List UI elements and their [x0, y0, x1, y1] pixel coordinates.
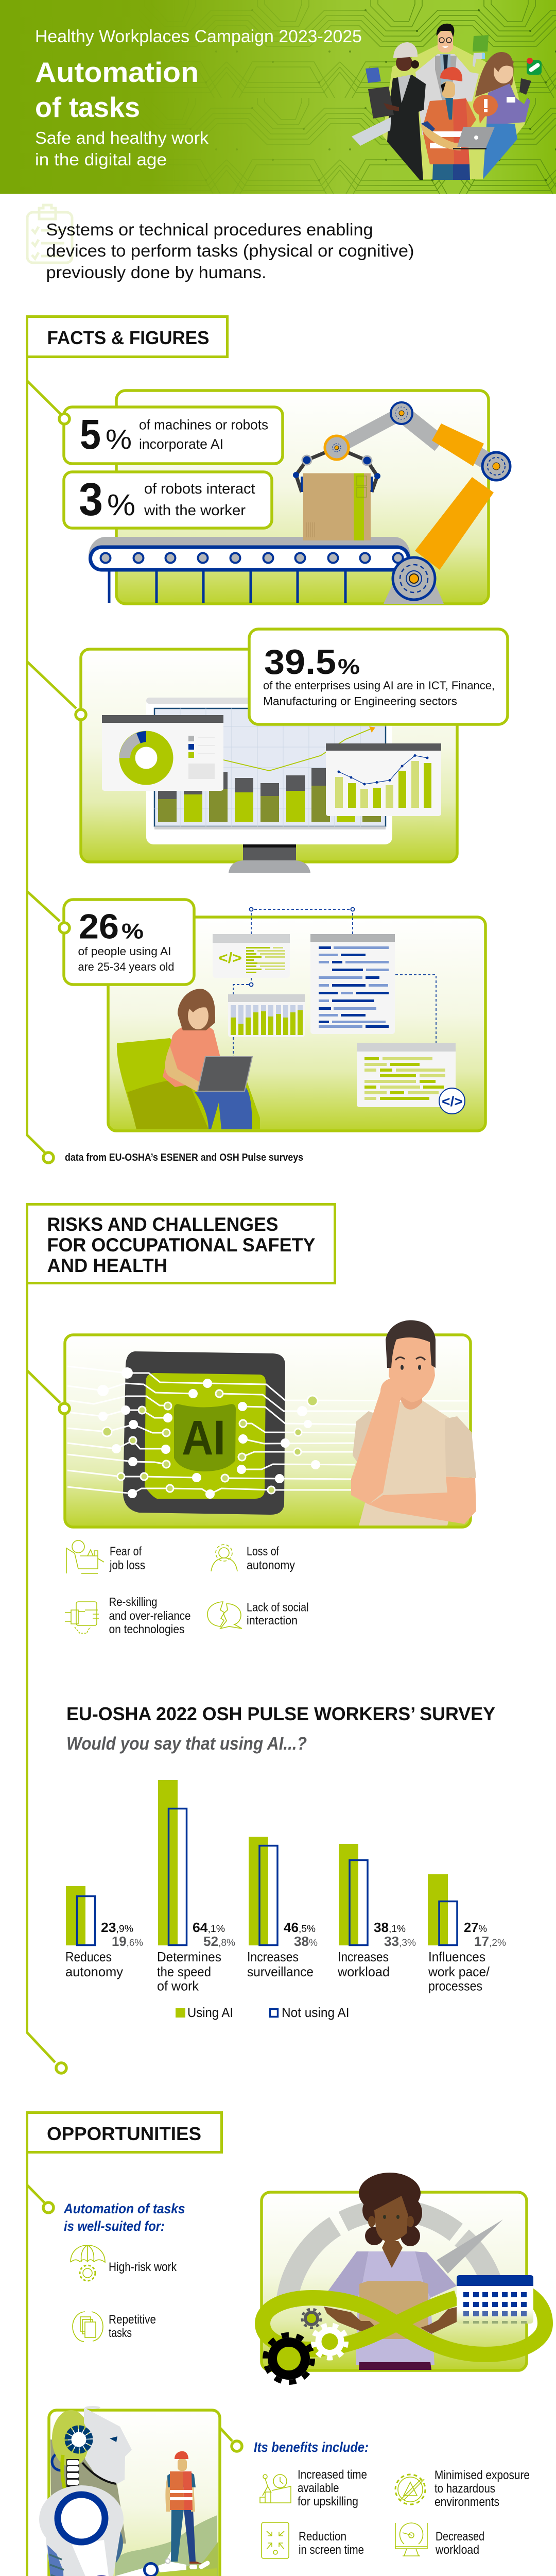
icon: hand with phone chained — [65, 1602, 99, 1633]
risk: re-skilling: Re-skilling — [109, 1595, 158, 1608]
item: repetitive tasks: tasks — [109, 2326, 132, 2340]
callout: 26%: 26 — [79, 907, 119, 946]
thermometer — [473, 35, 489, 67]
callout: 5%: of machines or robots — [139, 417, 268, 433]
panel: conveyor and robot — [89, 391, 510, 604]
marker dot — [59, 414, 70, 424]
benefit: minimised exposure: to hazardous — [435, 2482, 495, 2496]
group: determines speed — [157, 1780, 235, 1994]
risk: fear of job loss: Fear of — [110, 1545, 142, 1558]
icon: head with gear — [211, 1545, 237, 1571]
heading: risks: FOR OCCUPATIONAL SAFETY — [47, 1234, 316, 1256]
callout: 3%: of robots interact — [144, 481, 255, 497]
risk: loss of autonomy: Loss of — [247, 1545, 279, 1558]
chart legend: Using AI — [187, 2005, 233, 2020]
lab coat man — [415, 24, 479, 135]
intro: clipboard icon — [27, 205, 72, 263]
group: increases workload: workload — [337, 1964, 390, 1979]
code window 3: bars — [228, 994, 305, 1037]
icon: person climbing with clock — [260, 2475, 291, 2503]
needle — [437, 2219, 503, 2274]
intro text: devices to perform tasks (physical or cognitive) — [46, 241, 414, 260]
intro text: Systems or technical procedures enabling — [46, 220, 373, 239]
source note: data from EU-OSHA’s ESENER and OSH Pulse surveys — [65, 1152, 303, 1163]
benefit: increased time: Increased time — [298, 2468, 367, 2482]
gauge — [286, 2210, 491, 2307]
risk: lack of social interaction — [207, 1600, 309, 1629]
risk: fear of job loss: job loss — [109, 1558, 145, 1572]
benefit: reduction in screen time: Reduction — [299, 2530, 346, 2544]
callout: 39.5%: 39.5 — [264, 642, 336, 682]
callout: 3%: 3 — [79, 474, 103, 526]
marker dot — [59, 923, 70, 933]
item: repetitive tasks: Repetitive — [109, 2313, 156, 2327]
group: determines speed: 52,8% — [203, 1934, 235, 1949]
risk: fear of job loss — [66, 1540, 145, 1573]
AI chip: AI — [182, 1411, 225, 1465]
chart legend — [176, 2005, 349, 2020]
connector lines — [232, 908, 438, 1061]
timeline: risks — [27, 1203, 60, 2062]
group: reduces autonomy — [65, 1886, 143, 1979]
subheading: well-suited for: is well-suited for: — [64, 2218, 165, 2234]
subheading: benefits: Its benefits include: — [254, 2439, 369, 2455]
chart legend: Not using AI — [282, 2005, 349, 2020]
icon: screen with gauge — [395, 2523, 427, 2556]
monitor — [146, 698, 392, 873]
cardboard box — [303, 473, 371, 540]
heading: opportunities — [27, 2112, 221, 2153]
panel: woman with laptop and code windows — [108, 908, 485, 1131]
panel: woman with box and infinity loop — [262, 2173, 545, 2382]
icon: cycle of documents — [73, 2312, 103, 2342]
circuit lines — [67, 1366, 468, 1499]
marker dot — [59, 1403, 70, 1414]
group: reduces autonomy: Reduces — [65, 1949, 112, 1964]
callout: 3%: % — [107, 488, 135, 522]
icon: phone with arrows — [262, 2522, 289, 2558]
group: determines speed: the speed — [157, 1964, 211, 1979]
calendar — [457, 2275, 533, 2324]
title — [35, 56, 199, 123]
callout: 26%: of people using AI — [78, 945, 171, 958]
title: Automation — [35, 56, 199, 88]
group: increases surveillance: 46,5% — [284, 1920, 316, 1935]
group: determines speed: 64,1% — [193, 1920, 225, 1935]
code window 1: </> — [218, 950, 242, 967]
code window 4: </> — [442, 1094, 463, 1109]
benefit: decreased workload: workload — [435, 2543, 479, 2557]
group: increases surveillance — [247, 1837, 318, 1979]
group: increases workload: 38,1% — [374, 1920, 406, 1935]
risk: lack of social interaction: Lack of social — [247, 1600, 309, 1614]
panel: AI chip and thinking man — [65, 1320, 476, 1527]
group: increases workload — [337, 1844, 416, 1979]
risk: re-skilling — [65, 1595, 190, 1636]
survey title: EU-OSHA 2022 OSH PULSE WORKERS’ SURVEY — [66, 1703, 495, 1724]
group: influences work pace: processes — [428, 1978, 482, 1994]
callout: 5%: incorporate AI — [139, 436, 223, 452]
benefit: reduction in screen time — [262, 2522, 364, 2558]
benefit: increased time: available — [298, 2481, 339, 2495]
intro text — [46, 220, 414, 282]
woman — [324, 2173, 457, 2370]
survey question: Would you say that using AI...? — [66, 1734, 307, 1754]
panel: dashboard monitor — [81, 649, 457, 873]
callout: 5% — [64, 407, 283, 464]
heading: facts & figures: FACTS & FIGURES — [47, 327, 209, 348]
code window 2 — [310, 934, 395, 1034]
heading: opportunities: OPPORTUNITIES — [47, 2123, 201, 2144]
risk: re-skilling: on technologies — [109, 1622, 184, 1636]
timeline: opportunities — [27, 2111, 55, 2576]
campaign line: Healthy Workplaces Campaign 2023-2025 — [35, 27, 362, 46]
callout: 39.5%: Manufacturing or Engineering sectors — [263, 694, 457, 708]
group: influences work pace: work pace/ — [428, 1964, 490, 1979]
group: influences work pace: Influences — [428, 1949, 485, 1964]
benefit: minimised exposure: environments — [435, 2495, 499, 2509]
item: high-risk work: High-risk work — [109, 2260, 177, 2274]
AI chip — [123, 1351, 285, 1515]
illustration: group of workers — [352, 24, 542, 180]
heading: facts & figures — [27, 316, 228, 357]
group: determines speed: Determines — [157, 1949, 221, 1964]
thinking man — [351, 1320, 476, 1526]
bar chart — [65, 1780, 506, 1994]
conveyor belt — [89, 537, 410, 603]
risk: loss of autonomy: autonomy — [247, 1558, 295, 1572]
group: influences work pace: 17,2% — [474, 1934, 506, 1949]
callout: 39.5%: % — [338, 654, 360, 679]
subtitle: Safe and healthy work — [35, 128, 209, 147]
group: influences work pace — [428, 1874, 506, 1994]
robot body — [39, 2406, 207, 2576]
heading: risks: RISKS AND CHALLENGES — [47, 1214, 278, 1235]
site worker — [421, 67, 495, 180]
marker dot — [232, 2441, 242, 2451]
benefit: increased time — [260, 2468, 367, 2509]
risk: lack of social interaction: interaction — [247, 1614, 298, 1627]
alert bubble — [473, 95, 498, 124]
benefit: minimised exposure: Minimised exposure — [435, 2468, 530, 2482]
panel: robot and worker — [39, 2406, 220, 2576]
risk: loss of autonomy — [211, 1545, 295, 1572]
group: reduces autonomy: 23,9% — [101, 1920, 133, 1935]
group: reduces autonomy: autonomy — [65, 1964, 123, 1979]
subtitle: in the digital age — [35, 150, 167, 169]
woman in black suit — [368, 42, 426, 180]
marker dot — [56, 2063, 66, 2073]
group: increases surveillance: Increases — [247, 1949, 299, 1964]
subheading: well-suited for — [63, 2201, 185, 2234]
callout: 3%: with the worker — [144, 502, 246, 519]
marker dot — [76, 709, 86, 720]
timeline: facts and figures — [27, 315, 76, 1154]
group: determines speed: of work — [157, 1978, 199, 1994]
benefit: reduction in screen time: in screen time — [299, 2543, 364, 2557]
group: reduces autonomy: 19,6% — [112, 1934, 143, 1949]
icon: gear with crossed hazard — [395, 2475, 425, 2504]
intro text: previously done by humans. — [46, 263, 267, 282]
header banner — [0, 0, 556, 194]
right woman — [475, 52, 531, 179]
callout: 39.5% — [249, 629, 508, 724]
bars on screen — [158, 726, 381, 822]
marker dot — [43, 2202, 54, 2213]
group: increases workload: 33,3% — [384, 1934, 416, 1949]
benefit: decreased workload: Decreased — [436, 2530, 484, 2544]
subheading: well-suited for: Automation of tasks — [63, 2201, 185, 2216]
icon: umbrella over gear — [71, 2245, 105, 2281]
code window 1 — [213, 934, 290, 978]
item: high-risk work — [71, 2245, 177, 2281]
risk: re-skilling: and over-reliance — [109, 1609, 190, 1622]
marker dot — [43, 1153, 54, 1163]
pie chart window — [102, 715, 223, 791]
infinity loop — [263, 2293, 545, 2354]
callout: 5%: 5 — [80, 411, 101, 458]
callout: 39.5%: of the enterprises using AI are in ICT, Finance, — [263, 679, 495, 692]
code window 4 — [357, 1043, 465, 1114]
robot arm — [293, 402, 510, 604]
green pill icon — [527, 58, 542, 75]
heading: risks — [27, 1205, 335, 1283]
woman on armchair — [117, 989, 260, 1129]
group: influences work pace: 27% — [464, 1920, 487, 1935]
connector — [220, 2428, 232, 2441]
icon: broken speech bubble — [207, 1602, 242, 1629]
small worker — [165, 2451, 202, 2564]
group: increases surveillance: 38% — [294, 1934, 318, 1949]
hills — [106, 2515, 218, 2576]
bar and line chart window — [326, 743, 441, 816]
icon: worker with box — [66, 1540, 104, 1573]
heading: risks: AND HEALTH — [47, 1255, 167, 1276]
item: repetitive tasks — [73, 2312, 156, 2342]
benefit: minimised exposure — [395, 2468, 530, 2509]
group: increases surveillance: surveillance — [247, 1964, 314, 1979]
callout: 26%: % — [121, 919, 144, 943]
group: increases workload: Increases — [338, 1949, 389, 1964]
callout: 3% — [64, 472, 272, 528]
subtitle — [35, 128, 209, 169]
callout: 26% — [64, 900, 194, 985]
benefit: increased time: for upskilling — [298, 2495, 358, 2509]
title: of tasks — [35, 91, 140, 123]
benefit: decreased workload — [395, 2523, 484, 2557]
callout: 26%: are 25-34 years old — [78, 960, 174, 973]
gears — [265, 2309, 346, 2382]
callout: 5%: % — [106, 424, 132, 455]
